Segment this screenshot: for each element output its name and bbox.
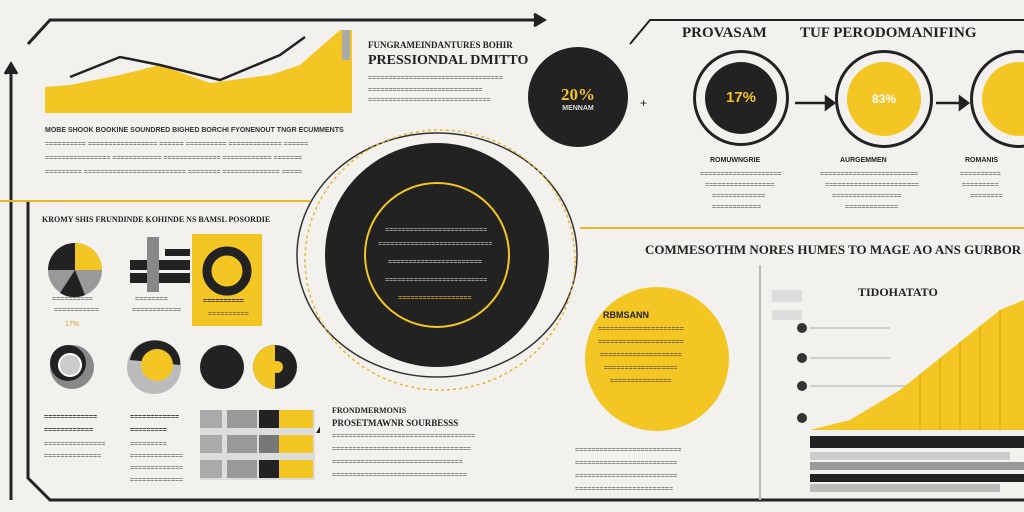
text: ======== [135, 296, 168, 303]
text: ========= [130, 427, 167, 434]
text: ============== [44, 453, 101, 460]
text: ======================= [388, 259, 482, 266]
text: ========================== [575, 447, 681, 454]
text: ========== [52, 296, 93, 303]
process circles [693, 50, 789, 146]
text: ================ ============ ============== ============ ======= [45, 155, 302, 162]
text: ==================== [600, 352, 682, 359]
text: ================== [604, 365, 678, 372]
text: =============== [610, 378, 671, 385]
text: ========= [962, 182, 999, 189]
text: ============= [44, 414, 97, 421]
text: ========= ========================= ======== ============== ===== [45, 169, 302, 176]
text: =========== [54, 307, 99, 314]
text: 83% [872, 92, 896, 106]
text: ================================= [332, 472, 467, 479]
text: ========== ================= ====== ========== ============= ====== [45, 141, 308, 148]
text: ===================== [598, 326, 684, 333]
text block top left: MOBE SHOOK BOOKINE SOUNDRED BIGHED BORCHI FYONENOUT TNGR ECUMMENTS [45, 127, 344, 134]
process circles: 17% [726, 89, 756, 106]
text: ================= [832, 193, 902, 200]
text: ======================= [825, 182, 919, 189]
text: ROMUWNGRIE [710, 157, 760, 164]
text: ================================== [332, 446, 471, 453]
text: ========================= [385, 227, 487, 234]
text: ============================ [378, 241, 492, 248]
circle stat [528, 47, 628, 147]
text: + [640, 96, 647, 110]
text: ================================= [368, 75, 503, 82]
text: ========== [203, 298, 244, 305]
text: =============== [44, 441, 105, 448]
right bottom chart: TIDOHATATO [858, 285, 938, 299]
circle stat: MENNAM [562, 105, 594, 112]
text: ============ [712, 204, 761, 211]
text: ========================= [575, 473, 677, 480]
text: ==================== [700, 171, 782, 178]
text: ======================== [575, 486, 673, 493]
text: AURGEMMEN [840, 157, 887, 164]
text: TUF PERODOMANIFING [800, 25, 977, 41]
text: ======================== [820, 171, 918, 178]
text: ============= [130, 453, 183, 460]
yellow circle [585, 287, 729, 431]
text: ===================== [598, 339, 684, 346]
text: ============= [130, 477, 183, 484]
text: ============================ [368, 87, 482, 94]
text: ROMANIS [965, 157, 998, 164]
text: =================================== [332, 433, 475, 440]
text: 17% [65, 321, 79, 328]
text: ================== [398, 295, 472, 302]
text: ========== [208, 311, 249, 318]
top right heading: PROVASAM [682, 25, 767, 41]
circle stat: 20% [561, 85, 595, 104]
text: ============= [712, 193, 765, 200]
bottom center text: FRONDMERMONIS [332, 406, 406, 415]
headline right middle: COMMESOTHM NORES HUMES TO MAGE AO ANS GURBOR [645, 242, 1021, 257]
text: RBMSANN [603, 310, 649, 320]
big center circle [296, 129, 578, 391]
text: ============= [130, 465, 183, 472]
text: ========================= [575, 460, 677, 467]
text: ================= [705, 182, 774, 189]
text: PRESSIONDAL DMITTO [368, 53, 528, 68]
text: ============ [130, 414, 179, 421]
text: ================================ [332, 459, 463, 466]
text: ============ [132, 307, 181, 314]
text: ============================== [368, 97, 491, 104]
text: PROSETMAWNR SOURBESSS [332, 418, 458, 428]
text: ============= [845, 204, 898, 211]
text: ============ [44, 427, 93, 434]
area chart top left [45, 30, 352, 113]
left middle section: KROMY SHIS FRUNDINDE KOHINDE NS BAMSL POSORDIE [42, 215, 270, 224]
text: ========================= [385, 277, 487, 284]
title: FUNGRAMEINDANTURES BOHIR [368, 40, 513, 50]
text: ========== [960, 171, 1001, 178]
text: ======== [970, 193, 1003, 200]
text: ========= [130, 441, 167, 448]
